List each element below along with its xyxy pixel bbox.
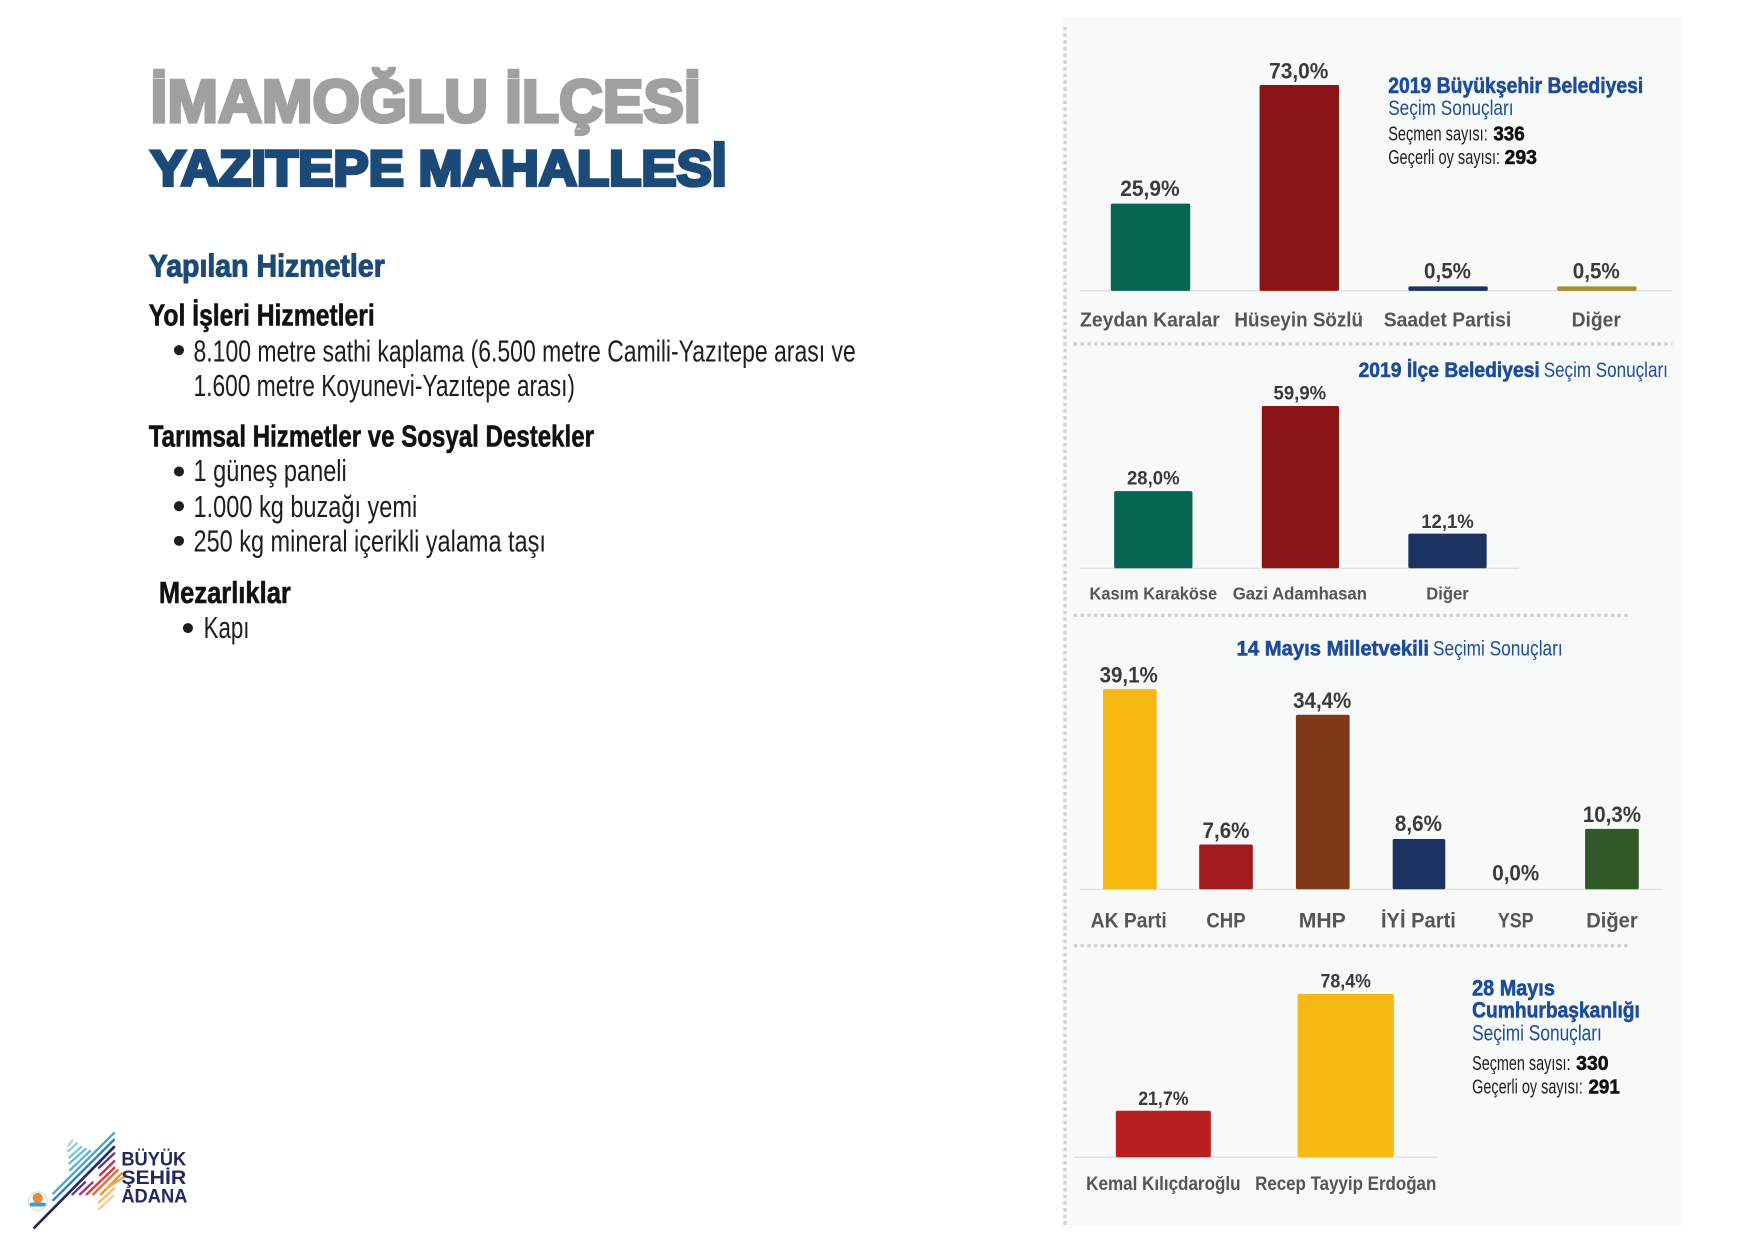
panel: election results background bbox=[1063, 17, 1681, 1227]
chart: 14 May parliamentary results: 34,4% bbox=[1293, 688, 1351, 713]
text block: agricultural services bbox=[149, 420, 594, 558]
chart: 2019 metropolitan results: 0,5% bbox=[1424, 259, 1471, 284]
heading: 2019 district results bbox=[1359, 358, 1668, 382]
chart: 14 May parliamentary results: İYİ Parti bbox=[1381, 908, 1456, 932]
text block: road works: 8.100 metre sathi kaplama (6.500 metre Camili-Yazıtepe arası ve bbox=[194, 335, 856, 368]
chart: 14 May parliamentary results: CHP bbox=[1206, 908, 1246, 932]
text block: agricultural services: 250 kg mineral içerikli yalama taşı bbox=[194, 525, 546, 558]
icon: striped star bbox=[34, 1133, 126, 1228]
text block: cemeteries bbox=[159, 577, 291, 645]
legend: 28 May presidential info: Geçerli oy sayısı: bbox=[1472, 1076, 1583, 1098]
chart: 14 May parliamentary results: AK Parti bbox=[1091, 908, 1167, 932]
legend: 2019 metropolitan info: 336 bbox=[1493, 123, 1525, 145]
heading: 2019 district results: 2019 İlçe Belediyesi bbox=[1359, 358, 1540, 382]
legend: 28 May presidential info: Seçmen sayısı: bbox=[1472, 1053, 1571, 1075]
legend: 2019 metropolitan info: 293 bbox=[1505, 147, 1537, 169]
chart: 2019 district results: 28,0% bbox=[1127, 468, 1180, 489]
legend: 2019 metropolitan info: 2019 Büyükşehir Belediyesi bbox=[1388, 73, 1643, 98]
chart: 2019 metropolitan results: 73,0% bbox=[1269, 58, 1328, 83]
text block: road works: Yol İşleri Hizmetleri bbox=[149, 300, 375, 333]
chart: 28 May presidential results: Recep Tayyip Erdoğan bbox=[1255, 1174, 1436, 1195]
chart: 14 May parliamentary results: MHP bbox=[1299, 908, 1346, 932]
chart: 2019 district results: Diğer bbox=[1426, 584, 1469, 604]
text block: agricultural services: Tarımsal Hizmetler ve Sosyal Destekler bbox=[149, 420, 594, 453]
chart: 14 May parliamentary results: 8,6% bbox=[1395, 811, 1442, 836]
title: İMAMOĞLU İLÇESİ bbox=[150, 67, 701, 135]
text block: cemeteries: Kapı bbox=[204, 612, 249, 645]
chart: 14 May parliamentary results bbox=[1079, 662, 1661, 932]
logo wordmark: BÜYÜK bbox=[121, 1150, 187, 1171]
legend: 2019 metropolitan info bbox=[1388, 73, 1643, 169]
chart: 2019 metropolitan results: 0,5% bbox=[1573, 259, 1620, 284]
legend: 2019 metropolitan info: Seçim Sonuçları bbox=[1388, 96, 1513, 120]
logo: Büyükşehir Adana bbox=[28, 1133, 188, 1228]
text block: agricultural services: 1 güneş paneli bbox=[194, 455, 347, 488]
logo wordmark bbox=[121, 1150, 188, 1208]
legend: 28 May presidential info: Cumhurbaşkanlığı bbox=[1472, 997, 1640, 1022]
chart: 14 May parliamentary results: YSP bbox=[1498, 908, 1534, 932]
legend: 28 May presidential info: 330 bbox=[1576, 1053, 1609, 1075]
chart: 14 May parliamentary results: 7,6% bbox=[1203, 818, 1250, 843]
chart: 14 May parliamentary results: 0,0% bbox=[1492, 860, 1539, 885]
legend: 2019 metropolitan info: Seçmen sayısı: bbox=[1388, 123, 1488, 145]
chart: 28 May presidential results: 78,4% bbox=[1321, 972, 1371, 993]
logo wordmark: ŞEHİR bbox=[121, 1168, 187, 1189]
chart: 28 May presidential results: Kemal Kılıçdaroğlu bbox=[1086, 1174, 1241, 1195]
chart: 14 May parliamentary results: Diğer bbox=[1586, 908, 1638, 932]
legend: 28 May presidential info: 28 Mayıs bbox=[1472, 976, 1555, 1001]
heading: 14 May parliamentary results: 14 Mayıs Milletvekili bbox=[1237, 637, 1429, 661]
chart: 2019 district results: Gazi Adamhasan bbox=[1233, 584, 1367, 604]
heading: services: Yapılan Hizmetler bbox=[149, 248, 385, 283]
heading: 14 May parliamentary results bbox=[1237, 637, 1563, 661]
chart: 2019 district results: Kasım Karaköse bbox=[1090, 584, 1217, 604]
chart: 2019 metropolitan results: Diğer bbox=[1572, 310, 1621, 332]
heading: 14 May parliamentary results: Seçimi Sonuçları bbox=[1433, 637, 1563, 661]
text block: cemeteries: Mezarlıklar bbox=[159, 577, 291, 610]
icon: Adana municipality seal bbox=[28, 1192, 47, 1210]
legend: 2019 metropolitan info: Geçerli oy sayısı: bbox=[1388, 147, 1500, 169]
text block: road works bbox=[149, 300, 856, 403]
legend: 28 May presidential info: 291 bbox=[1588, 1076, 1620, 1098]
chart: 28 May presidential results: 21,7% bbox=[1138, 1089, 1189, 1110]
chart: 2019 district results bbox=[1079, 383, 1519, 604]
legend: 28 May presidential info: Seçimi Sonuçları bbox=[1472, 1020, 1602, 1045]
chart: 14 May parliamentary results: 39,1% bbox=[1100, 662, 1158, 687]
text block: agricultural services: 1.000 kg buzağı yemi bbox=[194, 491, 417, 524]
chart: 2019 metropolitan results: Saadet Partisi bbox=[1384, 310, 1511, 332]
text block: road works: 1.600 metre Koyunevi-Yazıtepe arası) bbox=[194, 370, 575, 403]
chart: 2019 district results: 12,1% bbox=[1421, 512, 1474, 533]
chart: 2019 district results: 59,9% bbox=[1274, 383, 1326, 404]
chart: 2019 metropolitan results: Zeydan Karalar bbox=[1080, 310, 1220, 332]
chart: 14 May parliamentary results: 10,3% bbox=[1583, 802, 1641, 827]
legend: 28 May presidential info bbox=[1472, 976, 1640, 1098]
chart: 2019 metropolitan results: Hüseyin Sözlü bbox=[1234, 310, 1363, 332]
logo wordmark: ADANA bbox=[121, 1187, 188, 1208]
chart: 28 May presidential results bbox=[1074, 972, 1437, 1195]
chart: 2019 metropolitan results bbox=[1079, 58, 1672, 332]
title: YAZITEPE MAHALLESİ bbox=[150, 140, 727, 197]
title bbox=[150, 67, 727, 197]
heading: 2019 district results: Seçim Sonuçları bbox=[1544, 358, 1668, 382]
chart: 2019 metropolitan results: 25,9% bbox=[1120, 176, 1180, 201]
